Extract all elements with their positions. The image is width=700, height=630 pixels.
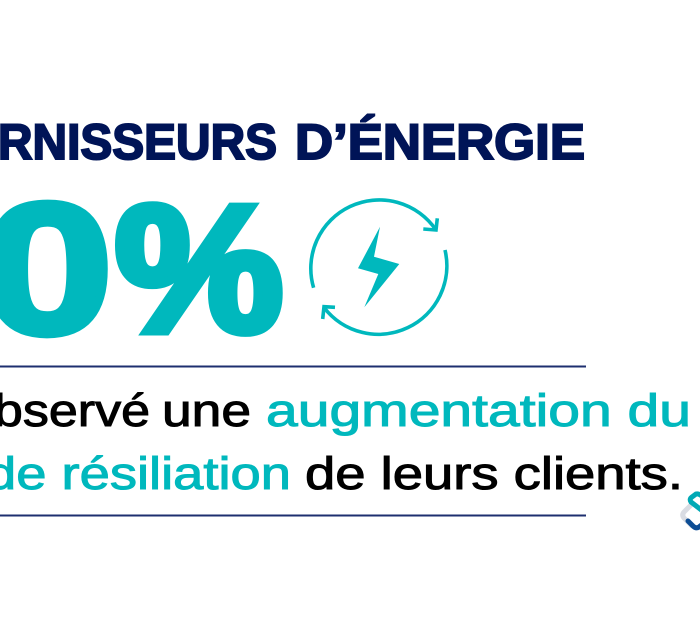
- line one: [0, 385, 691, 436]
- heading: D’ÉNERGIE: [295, 114, 585, 170]
- big percentage: %: [115, 169, 283, 370]
- line one: augmentation du: [266, 385, 691, 436]
- heading: RNISSEURS: [0, 114, 277, 170]
- top divider: [0, 366, 586, 368]
- line two: [0, 448, 683, 499]
- icon: lightning bolt in circular arrows: [311, 200, 447, 334]
- statement text: [0, 385, 691, 499]
- heading: [0, 114, 585, 170]
- icon: logo mark: [683, 494, 700, 528]
- big percentage: [0, 166, 283, 373]
- bottom divider: [0, 514, 586, 516]
- line two: de leurs clients.: [305, 448, 683, 499]
- line one: une: [162, 385, 251, 436]
